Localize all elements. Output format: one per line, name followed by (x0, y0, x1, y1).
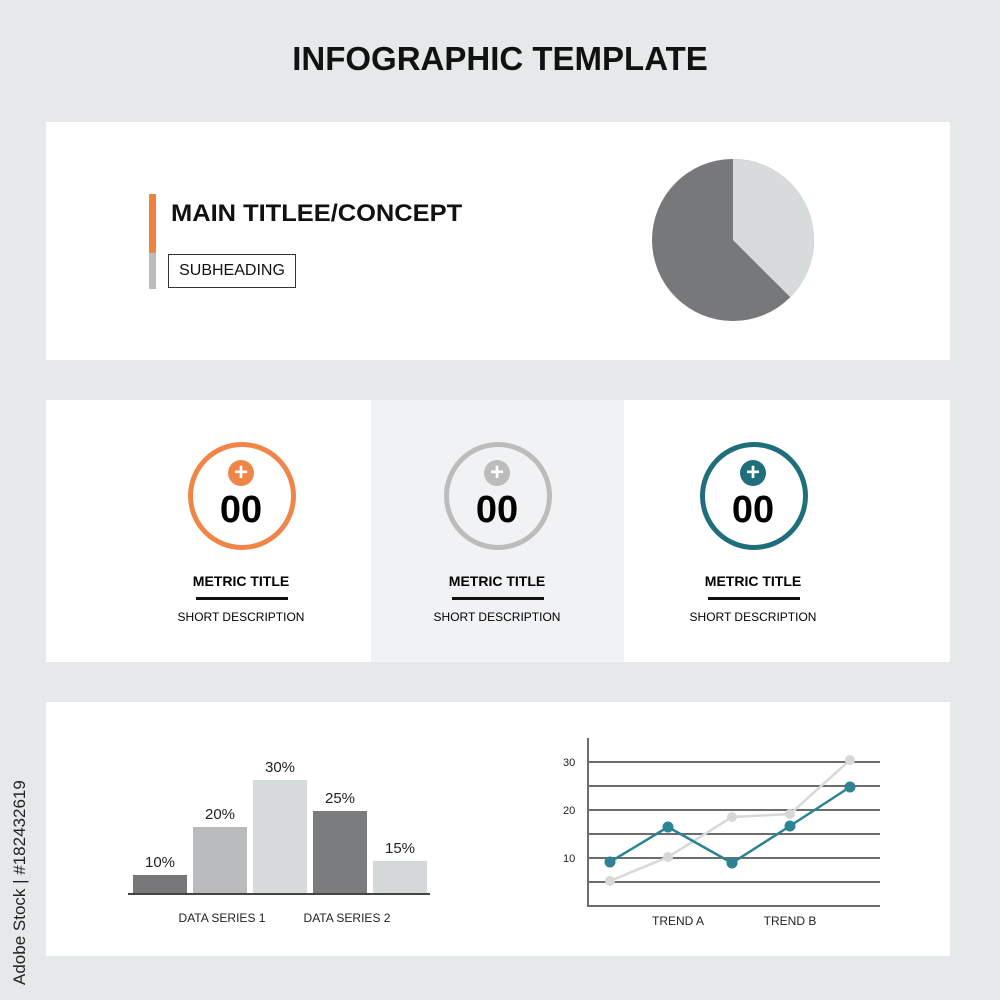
bar chart: 10% (145, 854, 175, 871)
metric 3: SHORT DESCRIPTION (690, 610, 816, 624)
metric 2: 00 (476, 489, 518, 531)
metric 1: METRIC TITLE (193, 573, 289, 589)
bar chart: 20% (205, 806, 235, 823)
panel: charts (46, 702, 950, 956)
panel: header (46, 122, 950, 360)
metric 2 (434, 442, 560, 624)
watermark id: Adobe Stock | #182432619 (10, 780, 29, 985)
line chart: TREND B (764, 914, 816, 928)
bar chart: 30% (265, 759, 295, 776)
metric 2: SHORT DESCRIPTION (434, 610, 560, 624)
metric 3: METRIC TITLE (705, 573, 801, 589)
metric 3 (690, 442, 816, 624)
pie chart (652, 159, 814, 321)
metric 3: + (746, 459, 760, 486)
line chart: 10 (563, 853, 575, 865)
bar chart: 15% (385, 840, 415, 857)
accent bar (149, 194, 156, 289)
line chart: 30 (563, 757, 575, 769)
metric 1: 00 (220, 489, 262, 531)
panel: metrics (46, 400, 950, 662)
main title: MAIN TITLEE/CONCEPT (171, 200, 462, 227)
line chart: 20 (563, 805, 575, 817)
metric 2: METRIC TITLE (449, 573, 545, 589)
metric 3: 00 (732, 489, 774, 531)
subheading: SUBHEADING (179, 262, 285, 279)
metric 1 (178, 442, 304, 624)
metric 1: + (234, 459, 248, 486)
bar chart: 25% (325, 790, 355, 807)
metric 2: + (490, 459, 504, 486)
bar chart: DATA SERIES 2 (304, 911, 391, 925)
title: INFOGRAPHIC TEMPLATE (292, 40, 708, 77)
subheading (168, 254, 296, 288)
metric 1: SHORT DESCRIPTION (178, 610, 304, 624)
bar chart: DATA SERIES 1 (179, 911, 266, 925)
line chart: TREND A (652, 914, 704, 928)
